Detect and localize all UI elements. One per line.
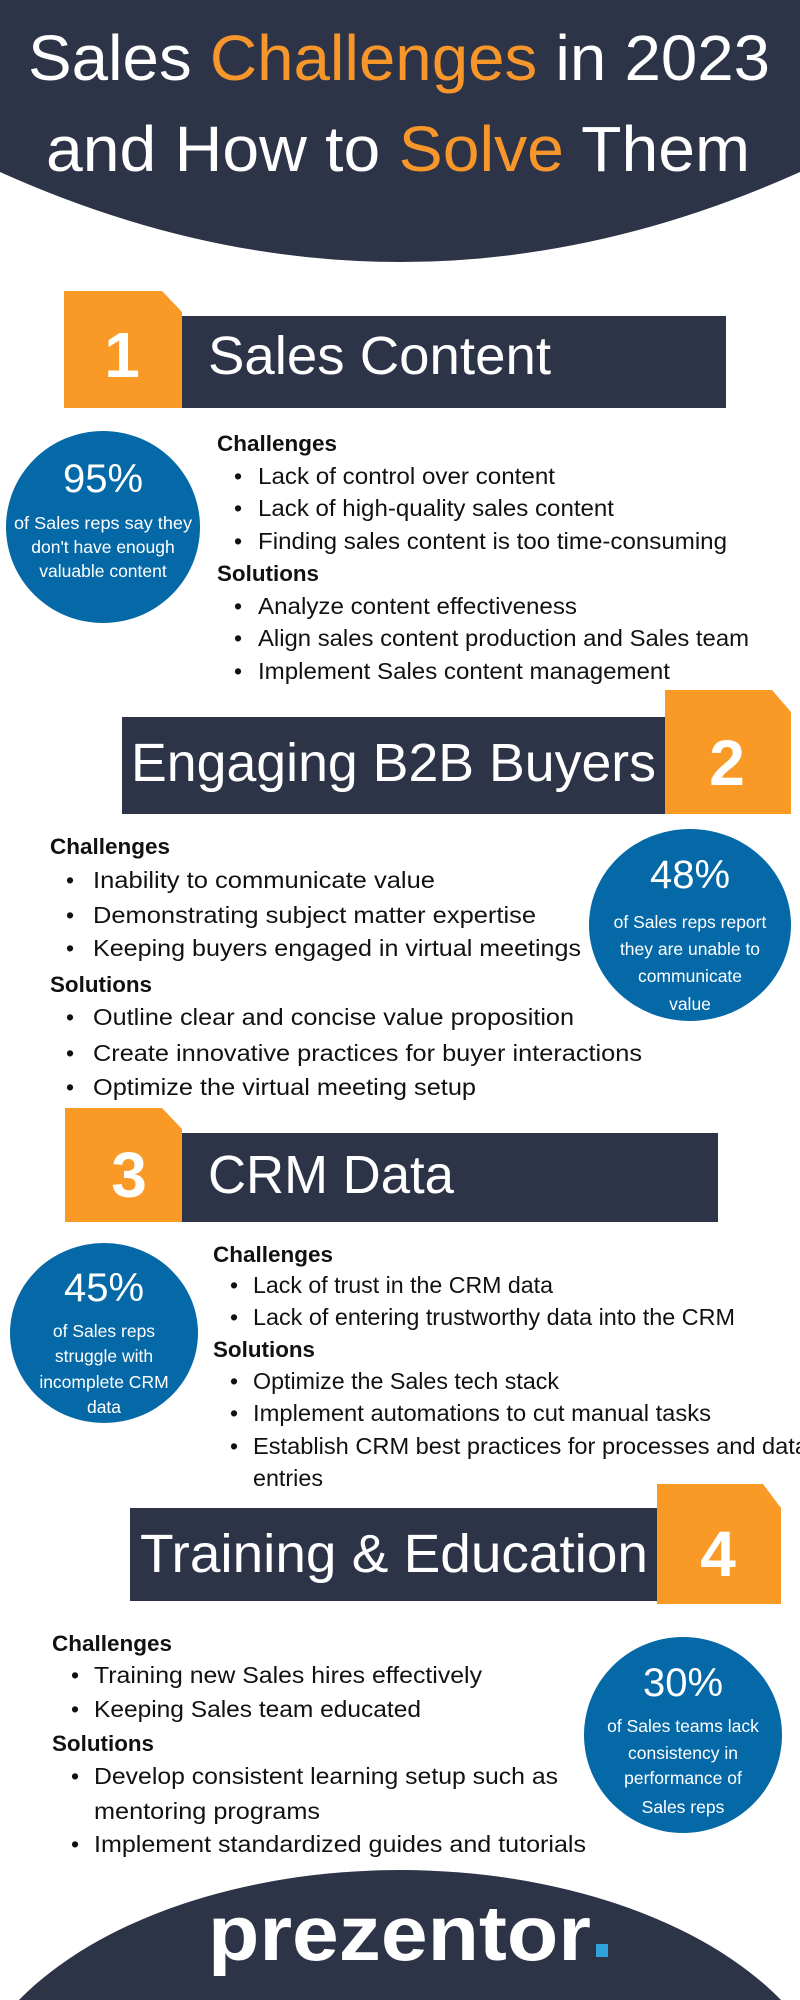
section 1 text: • — [234, 528, 242, 554]
section 1 text: Lack of high-quality sales content — [258, 495, 615, 521]
section 4 text: Develop consistent learning setup such as — [94, 1763, 558, 1789]
stat circle 1: don't have enough — [31, 537, 175, 557]
section 4 heading: Training & Education — [140, 1524, 648, 1584]
section 4 text: • — [71, 1662, 79, 1688]
section 2 text: Keeping buyers engaged in virtual meetings — [93, 935, 581, 961]
section 1 heading — [64, 291, 726, 408]
section 4 text: Solutions — [52, 1731, 154, 1756]
stat circle 2: communicate — [638, 966, 742, 986]
section 1 text: Lack of control over content — [258, 463, 556, 489]
stat circle 2: 48% — [650, 853, 730, 897]
section 1 text — [217, 431, 749, 684]
section 4 heading: 4 — [700, 1518, 736, 1590]
section 3 heading: CRM Data — [208, 1145, 455, 1205]
section 4 text: • — [71, 1696, 79, 1722]
section 1 text: • — [234, 463, 242, 489]
section 3 heading — [65, 1108, 718, 1222]
section 2 text: • — [66, 902, 74, 928]
section 4 text: Implement standardized guides and tutorials — [94, 1831, 586, 1857]
stat circle 1 — [6, 431, 200, 623]
title: and How to Solve Them — [46, 113, 750, 185]
stat circle 1: 95% — [63, 457, 143, 501]
section 2 text — [50, 834, 642, 1100]
section 4 text: Challenges — [52, 1631, 172, 1656]
section 3 text: Establish CRM best practices for processes and data — [253, 1433, 800, 1459]
section 3 text: Optimize the Sales tech stack — [253, 1368, 560, 1394]
stat circle 1: valuable content — [39, 561, 167, 581]
section 3 text: Challenges — [213, 1242, 333, 1267]
section 2 text: • — [66, 1074, 74, 1100]
section 2 text: Challenges — [50, 834, 170, 859]
section 1 text: Finding sales content is too time-consuming — [258, 528, 727, 554]
stat circle 4: Sales reps — [642, 1797, 725, 1817]
section 1 heading: Sales Content — [208, 326, 551, 386]
section 2 text: • — [66, 867, 74, 893]
stat circle 2: value — [669, 994, 711, 1014]
section 4 text: mentoring programs — [94, 1798, 320, 1824]
section 4 text: • — [71, 1763, 79, 1789]
stat circle 2: they are unable to — [620, 939, 760, 959]
stat circle 3: 45% — [64, 1266, 144, 1310]
section 3 text: Lack of entering trustworthy data into the CRM — [253, 1304, 735, 1330]
title: Sales Challenges in 2023 — [28, 22, 770, 94]
section 1 text: • — [234, 593, 242, 619]
stat circle 3: incomplete CRM — [39, 1372, 169, 1392]
section 3 text: Solutions — [213, 1337, 315, 1362]
footer logo: prezentor — [208, 1889, 591, 1977]
section 2 text: Solutions — [50, 972, 152, 997]
section 3 text: • — [230, 1400, 238, 1426]
section 1 text: Analyze content effectiveness — [258, 593, 577, 619]
stat circle 2: of Sales reps report — [614, 912, 766, 932]
section 3 text: • — [230, 1304, 238, 1330]
stat circle 4: performance of — [624, 1768, 742, 1788]
stat circle 3: of Sales reps — [53, 1321, 155, 1341]
section 1 text: • — [234, 625, 242, 651]
section 2 heading: Engaging B2B Buyers — [131, 733, 656, 793]
section 1 text: Implement Sales content management — [258, 658, 671, 684]
section 1 text: Solutions — [217, 561, 319, 586]
stat circle 4 — [584, 1637, 782, 1833]
section 2 text: Demonstrating subject matter expertise — [93, 902, 536, 928]
section 2 text: Outline clear and concise value proposition — [93, 1004, 574, 1030]
section 2 text: Create innovative practices for buyer interactions — [93, 1040, 642, 1066]
section 2 text: Inability to communicate value — [93, 867, 435, 893]
section 3 text: • — [230, 1433, 238, 1459]
section 4 text: • — [71, 1831, 79, 1857]
section 4 text: Training new Sales hires effectively — [94, 1662, 483, 1688]
section 3 heading: 3 — [111, 1139, 147, 1211]
section 3 text: entries — [253, 1465, 323, 1491]
section 2 text: Optimize the virtual meeting setup — [93, 1074, 476, 1100]
stat circle 4: consistency in — [628, 1743, 738, 1763]
section 1 text: • — [234, 658, 242, 684]
section 1 heading: 1 — [104, 319, 140, 391]
header banner — [0, 0, 800, 262]
section 1 text: Challenges — [217, 431, 337, 456]
section 3 text: Lack of trust in the CRM data — [253, 1272, 553, 1298]
stat circle 3 — [10, 1243, 198, 1423]
section 3 text — [213, 1242, 800, 1491]
stat circle 4: of Sales teams lack — [607, 1716, 759, 1736]
section 4 text — [52, 1631, 586, 1857]
section 2 heading — [122, 690, 791, 814]
section 4 text: Keeping Sales team educated — [94, 1696, 421, 1722]
title — [28, 22, 770, 185]
section 2 text: • — [66, 1040, 74, 1066]
stat circle 4: 30% — [643, 1661, 723, 1705]
stat circle 3: struggle with — [55, 1346, 153, 1366]
stat circle 2 — [589, 829, 791, 1021]
section 3 text: • — [230, 1368, 238, 1394]
section 1 text: • — [234, 495, 242, 521]
section 4 heading — [130, 1484, 781, 1604]
stat circle 3: data — [87, 1397, 121, 1417]
footer logo — [19, 1870, 781, 2000]
section 3 text: • — [230, 1272, 238, 1298]
section 3 text: Implement automations to cut manual tasks — [253, 1400, 711, 1426]
stat circle 1: of Sales reps say they — [14, 513, 192, 533]
section 2 heading: 2 — [709, 727, 745, 799]
section 2 text: • — [66, 1004, 74, 1030]
section 2 text: • — [66, 935, 74, 961]
section 1 text: Align sales content production and Sales team — [258, 625, 749, 651]
